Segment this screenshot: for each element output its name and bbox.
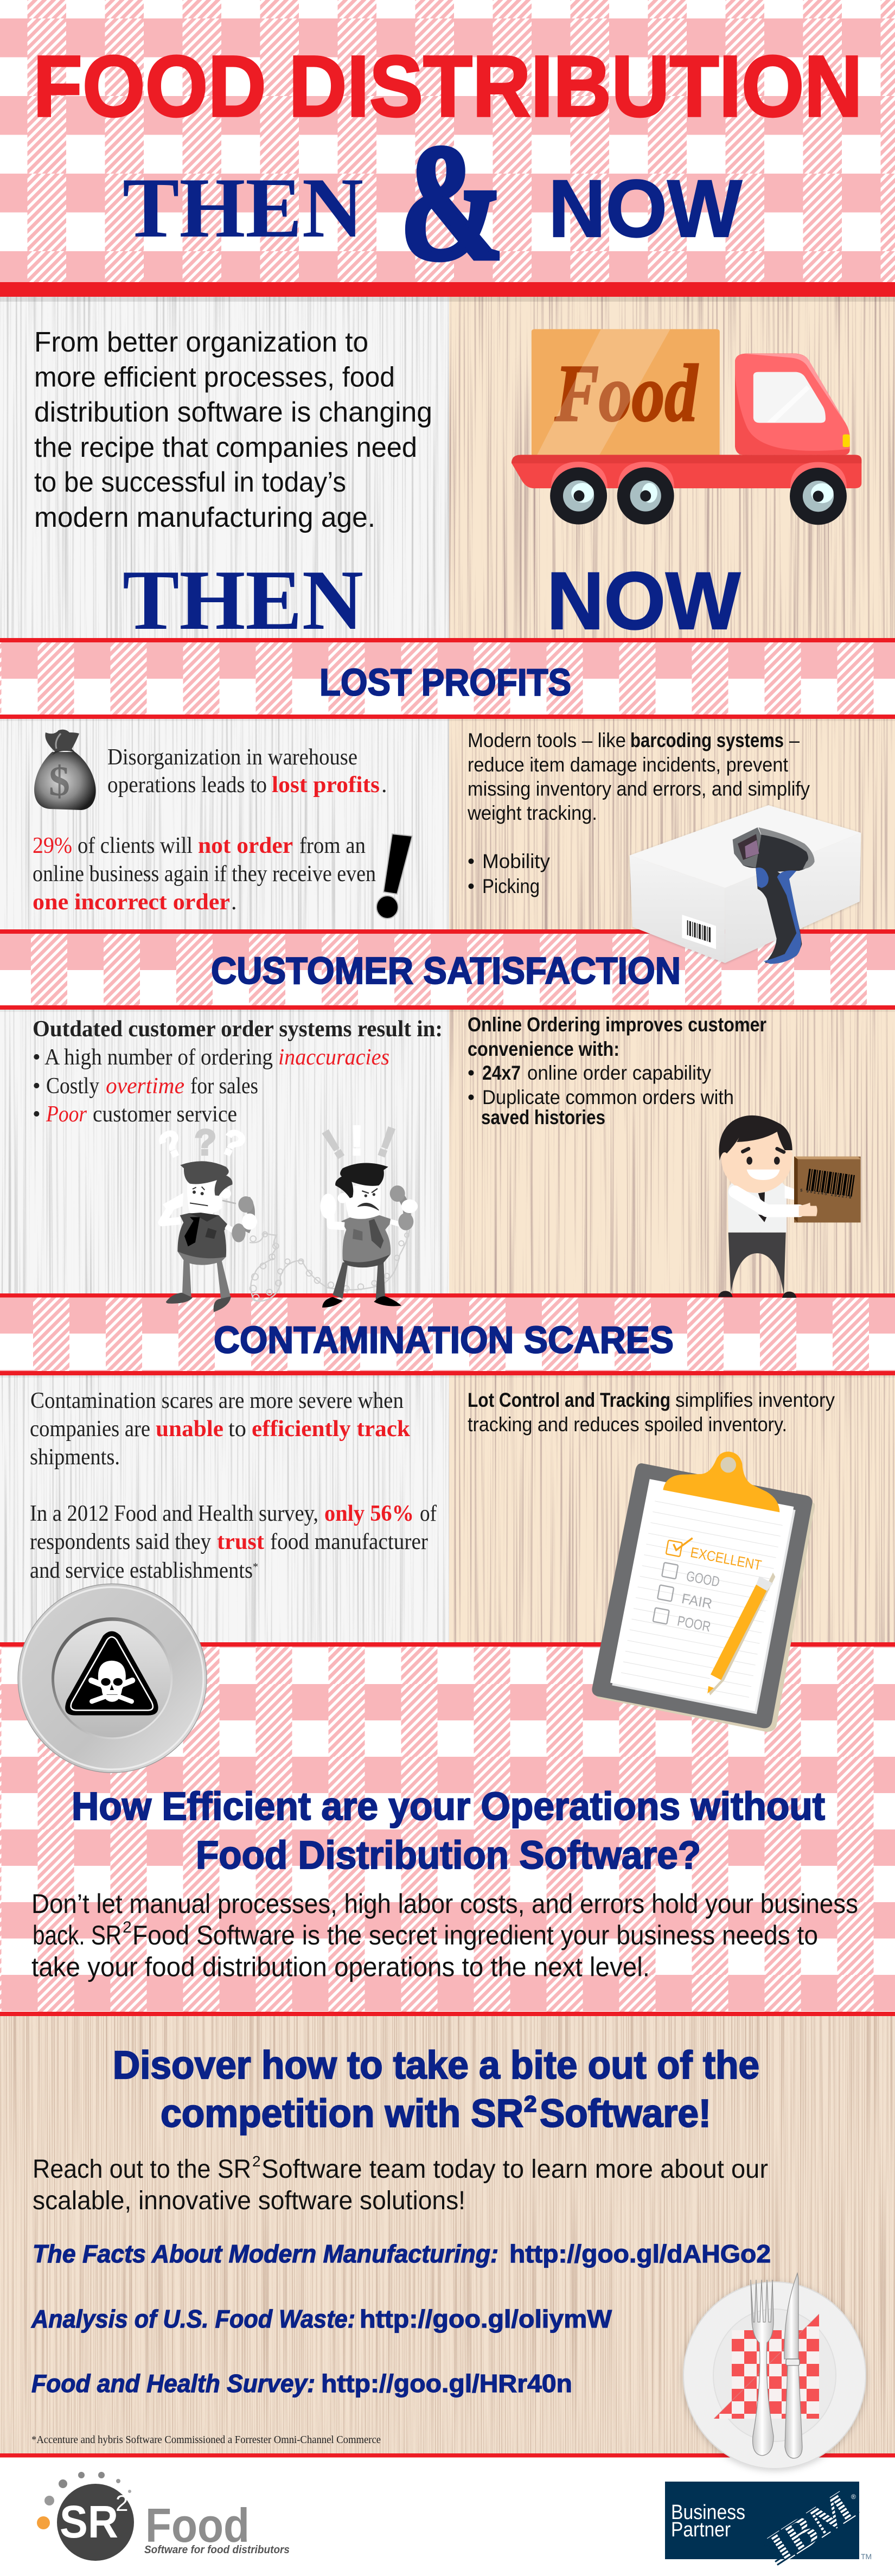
text: online ordering: convenience with: xyxy=(468,1038,619,1060)
text: don't let manual processes: back. SR xyxy=(33,1920,122,1950)
text: modern tools: – xyxy=(789,729,800,751)
text: survey stat: of xyxy=(420,1501,437,1526)
logo: IBM business partner: TM xyxy=(861,2552,872,2561)
links: sources: Analysis of U.S. Food Waste: xyxy=(31,2305,355,2333)
icon: clipboard checklist with pencil: GOOD xyxy=(685,1568,721,1590)
text: survey stat xyxy=(30,1501,437,1583)
column heading: then: THEN xyxy=(123,553,363,648)
heading: how efficient: How Efficient are your Operations without xyxy=(72,1785,825,1828)
bullet list: mobility and picking: Mobility xyxy=(482,850,550,872)
text: reach out xyxy=(33,2153,768,2215)
intro paragraph: modern manufacturing age. xyxy=(34,502,375,533)
heading: discover: Software! xyxy=(540,2092,711,2135)
text: survey stat: food manufacturer xyxy=(270,1529,428,1554)
band: contamination gingham xyxy=(0,1297,895,1371)
text: reach out: scalable, innovative software solutions! xyxy=(33,2186,465,2215)
text: 29 percent stat: one incorrect order xyxy=(33,890,230,915)
text: survey stat: * xyxy=(253,1561,258,1573)
text: 29 percent stat: . xyxy=(231,890,236,915)
text: online ordering xyxy=(468,1013,766,1128)
links: sources xyxy=(31,2240,771,2398)
text: outdated order systems: inaccuracies xyxy=(278,1045,389,1070)
icon: exclamation mark xyxy=(376,834,412,919)
icon: money bag: $ xyxy=(49,757,70,805)
panel: customer satisfaction then xyxy=(0,1010,449,1293)
title: & xyxy=(400,111,504,295)
text: 29 percent stat: not order xyxy=(198,833,293,858)
text: disorganization: lost profits xyxy=(272,773,380,798)
bullet list: mobility and picking: • xyxy=(468,875,475,897)
text: contamination scares xyxy=(30,1388,411,1470)
icon: clipboard checklist with pencil: FAIR xyxy=(680,1591,713,1612)
panel: discover wood xyxy=(0,2016,895,2453)
intro paragraph: the recipe that companies need xyxy=(34,432,417,463)
text: don't let manual processes: Food Software is the secret ingredient your business needs to xyxy=(132,1920,818,1950)
illustration: two frustrated men on phones: ! xyxy=(372,1118,401,1166)
heading: discover xyxy=(113,2044,759,2135)
panel: efficiency gingham xyxy=(0,1647,895,2012)
text: lot control xyxy=(468,1389,835,1436)
text: 29 percent stat: from an xyxy=(299,833,366,858)
title: NOW xyxy=(548,163,742,254)
text: contamination scares: efficiently track xyxy=(252,1417,411,1442)
text: reach out: Reach out to the SR xyxy=(33,2155,251,2184)
text: contamination scares: shipments. xyxy=(30,1445,120,1470)
text: 29 percent stat: 29% xyxy=(33,833,72,858)
illustration: two frustrated men on phones: ? xyxy=(194,1123,216,1163)
text: online ordering: • xyxy=(468,1062,475,1084)
text: disorganization: operations leads to xyxy=(107,773,267,798)
logo: SR2 Food: Software for food distributors xyxy=(144,2544,290,2556)
header gingham background xyxy=(0,0,895,282)
panel: right wood intro xyxy=(449,297,895,638)
icon: clipboard checklist with pencil xyxy=(592,1451,815,1732)
text: modern tools: weight tracking. xyxy=(467,802,597,824)
text: online ordering: Duplicate common orders with xyxy=(482,1086,734,1108)
text: outdated order systems: Poor xyxy=(46,1102,87,1127)
illustration: delivery man holding barcoded package: 5 992145 152278 xyxy=(800,1188,852,1200)
icon: food delivery truck xyxy=(512,329,861,525)
illustration: two frustrated men on phones: ! xyxy=(316,1121,351,1168)
heading: discover: 2 xyxy=(524,2091,536,2116)
illustration: two frustrated men on phones: ! xyxy=(350,1118,364,1164)
text: contamination scares: Contamination scares are more severe when xyxy=(30,1388,404,1413)
icon: clipboard checklist with pencil: POOR xyxy=(676,1614,712,1635)
text: outdated order systems: • xyxy=(33,1102,41,1127)
band: customer satisfaction gingham xyxy=(0,934,895,1005)
text: survey stat: respondents said they xyxy=(30,1529,211,1554)
text: modern tools: Modern tools – like xyxy=(468,729,626,751)
text: contamination scares: companies are xyxy=(30,1417,150,1442)
title: THEN xyxy=(123,161,363,256)
text: outdated order systems: overtime xyxy=(106,1074,184,1099)
illustration: two frustrated men on phones: ? xyxy=(153,1122,190,1168)
text: online ordering: Online Ordering improves customer xyxy=(468,1013,766,1036)
text: outdated order systems: • xyxy=(33,1074,41,1099)
intro paragraph: From better organization to xyxy=(34,327,368,358)
icon: barcode scanner and box xyxy=(630,805,861,964)
text: modern tools: barcoding systems xyxy=(630,729,784,751)
illustration: two frustrated men on phones xyxy=(153,1118,418,1312)
text: lot control: Lot Control and Tracking xyxy=(468,1389,670,1411)
links: sources: http://goo.gl/dAHGo2 xyxy=(509,2240,771,2268)
text: survey stat: In a 2012 Food and Health survey, xyxy=(30,1501,318,1526)
bullet list: mobility and picking xyxy=(468,850,550,897)
text: outdated order systems: customer service xyxy=(93,1102,237,1127)
footnote: *Accenture and hybris Software Commissioned a Forrester Omni-Channel Commerce xyxy=(31,2434,381,2446)
logo: IBM business partner: Business xyxy=(671,2501,745,2524)
heading: customer satisfaction: CUSTOMER SATISFACTION xyxy=(211,949,681,992)
panel: lost profits then xyxy=(0,719,449,929)
heading: contamination scares: CONTAMINATION SCARES xyxy=(214,1318,674,1361)
intro paragraph: more efficient processes, food xyxy=(34,361,395,393)
text: survey stat: and service establishments xyxy=(30,1558,253,1583)
text: 29 percent stat: of clients will xyxy=(78,833,193,858)
text: online ordering: online order capability xyxy=(527,1062,711,1084)
column heading: now: NOW xyxy=(547,555,740,646)
heading: how efficient xyxy=(72,1785,825,1877)
heading: discover: competition with SR xyxy=(161,2092,523,2135)
logo: SR2 Food: Food xyxy=(145,2498,250,2552)
text: disorganization: Disorganization in warehouse xyxy=(107,745,357,770)
logo: IBM business partner: Partner xyxy=(671,2518,731,2541)
bullet list: mobility and picking: • xyxy=(468,850,475,872)
text: disorganization: . xyxy=(381,773,387,798)
text: disorganization xyxy=(107,745,387,798)
text: outdated order systems: • xyxy=(33,1045,41,1070)
text: outdated order systems: A high number of ordering xyxy=(44,1045,273,1070)
logo: SR2 Food: SR xyxy=(60,2496,118,2547)
text: outdated order systems: Costly xyxy=(46,1074,99,1099)
text: don't let manual processes: 2 xyxy=(123,1918,132,1936)
logo: SR2 Food xyxy=(37,2472,290,2561)
icon: clipboard checklist with pencil: EXCELLENT xyxy=(689,1545,763,1573)
figure: left confused man xyxy=(162,1161,257,1312)
text: modern tools xyxy=(467,729,810,824)
title xyxy=(33,37,862,295)
text: contamination scares: unable xyxy=(156,1417,223,1442)
text: outdated order systems: for sales xyxy=(190,1074,258,1099)
text: online ordering: • xyxy=(468,1086,475,1108)
text: outdated order systems xyxy=(33,1017,443,1127)
logo: IBM business partner: ® xyxy=(851,2493,856,2501)
text: don't let manual processes xyxy=(31,1889,858,1982)
text: modern tools: missing inventory and errors, and simplify xyxy=(468,778,810,800)
icon: food delivery truck: Food xyxy=(554,348,699,438)
logo: IBM business partner xyxy=(665,2479,872,2575)
icon: skull warning on plate xyxy=(18,1584,207,1772)
text: survey stat: only 56% xyxy=(324,1501,414,1526)
panel: left wood intro xyxy=(0,297,449,638)
band: lost profits gingham xyxy=(0,642,895,715)
text: reach out: Software team today to learn more about our xyxy=(261,2155,768,2184)
text: 29 percent stat: online business again if they receive even xyxy=(33,862,376,887)
intro paragraph xyxy=(34,327,432,533)
text: reach out: 2 xyxy=(252,2153,261,2170)
text: outdated order systems: Outdated customer order systems result in: xyxy=(33,1017,443,1042)
text: survey stat: trust xyxy=(217,1529,264,1554)
links: sources: http://goo.gl/HRr40n xyxy=(321,2369,572,2398)
panel: contamination then xyxy=(0,1375,449,1642)
links: sources: http://goo.gl/oliymW xyxy=(360,2305,612,2333)
links: sources: The Facts About Modern Manufacturing: xyxy=(33,2240,498,2268)
panel: customer satisfaction now xyxy=(449,1010,895,1293)
illustration: two frustrated men on phones: ? xyxy=(214,1121,251,1166)
text: 29 percent stat xyxy=(33,833,376,915)
text: don't let manual processes: take your food distribution operations to the next level. xyxy=(31,1952,650,1982)
icon: money bag xyxy=(34,730,96,810)
heading: lost profits: LOST PROFITS xyxy=(319,661,571,703)
illustration: delivery man holding barcoded package xyxy=(718,1115,861,1298)
icon: plate with napkin and silverware xyxy=(683,2273,866,2469)
text: contamination scares: to xyxy=(228,1417,246,1442)
panel: lost profits now xyxy=(449,719,895,929)
figure: right angry man xyxy=(320,1163,418,1308)
text: lot control: simplifies inventory xyxy=(675,1389,835,1411)
text: modern tools: reduce item damage incidents, prevent xyxy=(468,754,789,776)
intro paragraph: distribution software is changing xyxy=(34,397,432,428)
logo: SR2 Food: 2 xyxy=(116,2490,128,2516)
text: online ordering: saved histories xyxy=(481,1106,605,1128)
text: online ordering: 24x7 xyxy=(482,1062,521,1084)
heading: discover: Disover how to take a bite out of the xyxy=(113,2044,759,2087)
panel: contamination now xyxy=(449,1375,895,1642)
text: lot control: tracking and reduces spoiled inventory. xyxy=(468,1413,787,1436)
links: sources: Food and Health Survey: xyxy=(31,2369,315,2398)
bullet list: mobility and picking: Picking xyxy=(482,875,540,897)
logo: IBM business partner: IBM xyxy=(760,2482,862,2573)
heading: how efficient: Food Distribution Software? xyxy=(196,1834,701,1877)
intro paragraph: to be successful in today’s xyxy=(34,467,346,498)
